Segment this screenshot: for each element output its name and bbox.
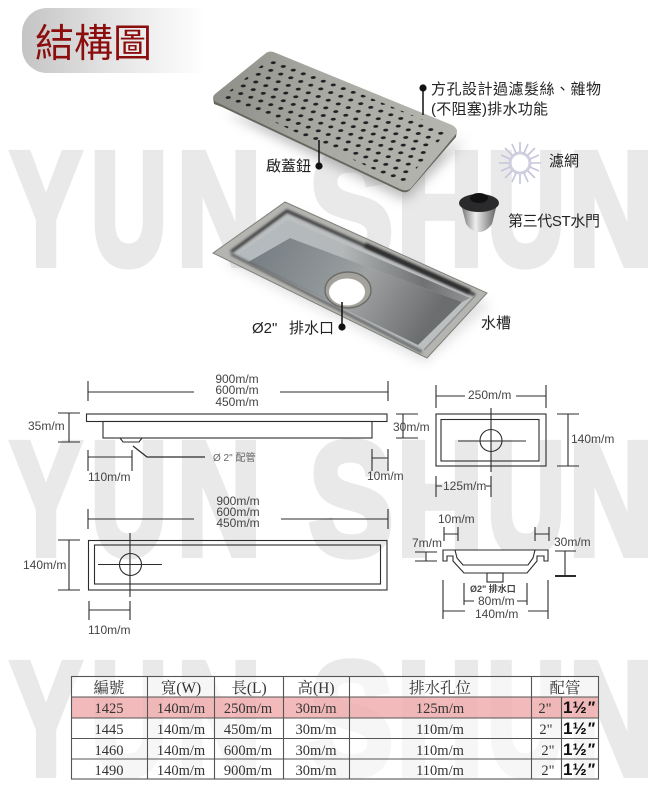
table header: 排水孔位 — [409, 679, 471, 697]
table row 1445 — [94, 722, 553, 738]
icon: third generation ST drain valve — [459, 193, 499, 232]
table row 1460: 2" — [541, 743, 555, 759]
table row 1460: 140m/m — [157, 743, 206, 759]
diagram: front elevation: 30m/m — [393, 420, 430, 434]
diagram: plan view long — [23, 494, 388, 637]
diagram: front elevation: 600m/m — [215, 383, 259, 397]
table row 1425 — [94, 701, 552, 717]
callout: drain outlet — [252, 302, 346, 337]
icon: filter mesh — [499, 142, 541, 184]
diagram: cross section: 10m/m — [438, 512, 475, 526]
table row 1460: 600m/m — [224, 743, 273, 759]
diagram: front elevation: 450m/m — [215, 395, 259, 409]
watermark: YUN SHUN top — [11, 119, 652, 298]
drain hole — [325, 272, 371, 308]
watermark: YUN SHUN top: N — [177, 119, 261, 298]
table row 1490 — [94, 763, 555, 779]
watermark: YUN SHUN top: U — [91, 119, 167, 298]
diagram: plan view short: 250m/m — [468, 388, 511, 402]
table header: 配管 — [549, 679, 581, 697]
diagram: cross section: 80m/m — [478, 594, 515, 608]
callout: lid knob — [266, 140, 323, 175]
table row 1490: 140m/m — [157, 763, 206, 779]
watermark: YUN SHUN middle: U — [487, 409, 565, 588]
watermark: YUN SHUN top: S — [309, 119, 393, 298]
diagram: plan view long: 450m/m — [216, 516, 260, 530]
callout: square hole design: (不阻塞)排水功能 — [431, 100, 548, 118]
diagram: cross section: 140m/m — [475, 607, 518, 621]
table header: 高(H) — [297, 678, 335, 697]
label: filter mesh: 濾網 — [549, 153, 579, 170]
callout: square hole design — [419, 81, 601, 118]
table row 1445: 140m/m — [157, 722, 206, 738]
pipe size fractions: 1½" — [563, 719, 596, 738]
table row 1425: 125m/m — [416, 701, 465, 717]
table row 1425: 250m/m — [224, 701, 273, 717]
title: 結構圖 — [35, 23, 152, 66]
diagram: front elevation: 110m/m — [88, 470, 130, 484]
watermark: YUN SHUN middle: Y — [11, 409, 81, 588]
label: valve: 第三代ST水門 — [508, 212, 600, 230]
specification table — [71, 676, 599, 779]
title banner — [22, 8, 205, 73]
table row 1445: 450m/m — [224, 722, 273, 738]
diagram: cross section: Ø2" 排水口 — [470, 583, 516, 594]
table row 1490: 1490 — [94, 763, 124, 779]
table header: 寬(W) — [161, 678, 201, 697]
watermark: YUN SHUN bottom — [11, 629, 652, 800]
watermark: YUN SHUN middle: U — [91, 409, 167, 588]
diagram: cross section: 30m/m — [554, 535, 591, 549]
diagram: plan view long: 600m/m — [216, 505, 260, 519]
watermark: YUN SHUN middle — [11, 409, 652, 588]
table header — [93, 678, 581, 697]
table row 1460 — [94, 743, 555, 759]
watermark: YUN SHUN top: H — [397, 119, 483, 298]
table row 1460: 30m/m — [295, 743, 337, 759]
table row 1425: 30m/m — [295, 701, 337, 717]
callout: lid knob: 啟蓋鈕 — [266, 158, 311, 175]
photo: sink basin — [213, 202, 490, 362]
pipe size fractions — [563, 698, 596, 779]
table row 1490: 110m/m — [416, 763, 465, 779]
callout: square hole design: 方孔設計過濾髮絲、雜物 — [431, 81, 601, 98]
watermark: YUN SHUN top: U — [487, 119, 565, 298]
table row 1445: 2" — [539, 722, 553, 738]
table row 1460: 110m/m — [416, 743, 465, 759]
diagram: plan view long: 110m/m — [88, 623, 130, 637]
table row 1425: 1425 — [94, 701, 124, 717]
diagram: plan view short — [436, 385, 614, 497]
table row 1445: 110m/m — [416, 722, 465, 738]
table row 1460: 1460 — [94, 743, 124, 759]
diagram: front elevation: 35m/m — [28, 419, 65, 433]
diagram: cross section — [412, 512, 591, 621]
callout: drain outlet: 排水口 — [289, 320, 334, 337]
pipe size fractions: 1½" — [563, 760, 596, 779]
highlighted row 1425 — [71, 697, 599, 718]
diagram: front elevation: Ø 2" 配管 — [213, 451, 255, 464]
diagram: cross section: 7m/m — [412, 536, 442, 550]
callout: drain outlet: Ø2" — [252, 320, 277, 337]
diagram: plan view long: 900m/m — [216, 494, 260, 508]
diagram: front elevation: 10m/m — [367, 469, 404, 483]
watermark: YUN SHUN top: Y — [11, 119, 81, 298]
pipe size fractions: 1½" — [563, 698, 596, 717]
watermark: YUN SHUN middle: S — [309, 409, 393, 588]
table row 1490: 900m/m — [224, 763, 273, 779]
table row 1445: 30m/m — [295, 722, 337, 738]
table header: 長(L) — [231, 679, 267, 697]
watermark: YUN SHUN middle: H — [397, 409, 483, 588]
table row 1425: 140m/m — [157, 701, 206, 717]
diagram: front elevation: 900m/m — [215, 372, 259, 386]
diagram: plan view short: 140m/m — [571, 432, 614, 446]
diagram: front elevation — [28, 372, 430, 484]
photo: perforated cover plate — [213, 52, 465, 200]
diagram: plan view short: 125m/m — [443, 479, 486, 493]
table row 1490: 30m/m — [295, 763, 337, 779]
diagram: plan view long: 140m/m — [23, 558, 66, 572]
table row 1425: 2" — [538, 701, 552, 717]
table row 1490: 2" — [541, 763, 555, 779]
table row 1445: 1445 — [94, 722, 124, 738]
watermark: YUN SHUN middle: N — [177, 409, 261, 588]
pipe size fractions: 1½" — [563, 740, 596, 759]
label: sink: 水槽 — [481, 315, 511, 332]
table header: 編號 — [93, 679, 125, 697]
